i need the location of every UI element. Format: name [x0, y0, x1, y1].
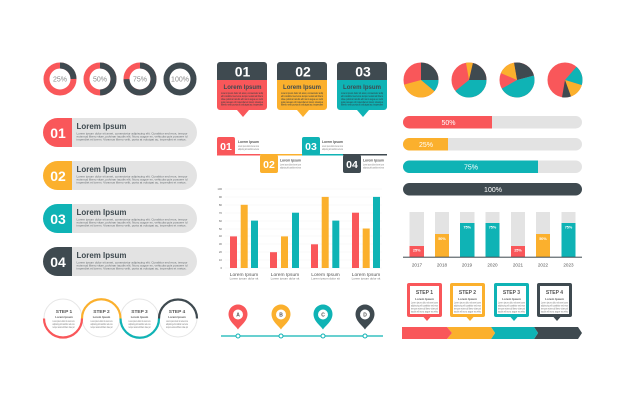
column fills	[410, 223, 576, 257]
step circle 1: Lorem ipsum dolor sit amet cons	[52, 319, 75, 323]
card 03: vitae pulvinar iaculis elit nunc augue ex vehi	[341, 97, 383, 101]
year labels	[412, 262, 574, 268]
panel: yearly stacked columns	[403, 212, 582, 268]
list row 02: 02	[50, 168, 66, 184]
step box 3: STEP 3	[503, 290, 520, 296]
chart category labels: Lorem Ipsum	[230, 272, 258, 278]
list row 03: euismod libero vitae, pulvinar iaculis elit. Nunc augue ex, vehicula quis posuere id	[76, 220, 188, 224]
step box 1	[407, 283, 442, 321]
step box 1: Lorem Ipsum	[415, 297, 434, 301]
pie 2	[459, 70, 479, 90]
card 02: vitae pulvinar iaculis elit nunc augue ex vehi	[281, 97, 323, 101]
step box 4: iaculis elit nunc augue ex vehic	[541, 310, 568, 314]
bar chart	[217, 187, 382, 280]
step box 1: iaculis elit nunc augue ex vehic	[411, 310, 438, 314]
panel: alternating timeline: adipiscing elit curabitur sed eros	[322, 147, 343, 151]
donut 100%: 100%	[171, 76, 189, 84]
card 02: 02	[295, 64, 311, 80]
timeline item 03: Lorem Ipsum	[322, 140, 343, 144]
list row 02: Lorem Ipsum	[76, 164, 127, 174]
step circle 3: tempor euismod libero vitae pul	[128, 325, 151, 329]
card 01: libero velit porta at volutpat ac imperdiet	[221, 102, 263, 106]
chart category labels: Lorem ipsum dolor sit	[271, 276, 300, 280]
list row 02: imperdiet et lorem. Vivamus libero velit, porta at volutpat ac, imperdiet et metus.	[76, 180, 187, 184]
bars group 1	[230, 205, 258, 268]
step box 1: adipiscing elit curabitur sed eros	[411, 304, 438, 308]
card 01: quis posuere id imperdiet et lorem vivamus	[221, 100, 263, 104]
column fills: 25%	[413, 248, 421, 252]
step circle 3	[120, 299, 158, 337]
column fills: 75%	[489, 226, 497, 230]
column fills: 25%	[514, 248, 522, 252]
step circle 1: Lorem Ipsum	[55, 315, 73, 319]
chart gridlines and axis labels: 20	[219, 250, 222, 254]
list row 03: 03	[50, 211, 66, 227]
card 03	[337, 62, 387, 117]
step box 1: Lorem ipsum dolor sit amet cons	[411, 300, 438, 304]
card 01: elit curabitur sed eros tempor euismod libero	[221, 94, 263, 98]
column backgrounds	[410, 212, 576, 257]
year labels: 2017	[412, 262, 423, 268]
donut 75%: 75%	[133, 76, 147, 84]
timeline item 04: Lorem Ipsum	[363, 158, 384, 162]
pin A	[228, 304, 248, 330]
column fills: 50%	[539, 237, 547, 241]
step circle 1	[44, 299, 82, 337]
column fills: 75%	[565, 226, 573, 230]
card 02	[277, 62, 327, 117]
step box 4: STEP 4	[546, 290, 563, 296]
step circle 3: Lorem ipsum dolor sit amet cons	[128, 319, 151, 323]
progress bar 50%	[403, 116, 582, 128]
step box 1: tempor euismod libero vitae pul	[411, 306, 438, 310]
step box 2: Lorem Ipsum	[458, 297, 477, 301]
timeline item 01: 01	[220, 141, 232, 153]
step box 2: Lorem ipsum dolor sit amet cons	[454, 300, 481, 304]
timeline item 01	[217, 137, 259, 155]
step box 3: Lorem Ipsum	[502, 297, 521, 301]
progress bar 75%: 75%	[464, 164, 478, 171]
column fills: 75%	[463, 226, 472, 230]
step box 3: Lorem ipsum dolor sit amet cons	[498, 300, 525, 304]
list row 04	[43, 247, 197, 276]
timeline item 03: 03	[305, 141, 317, 153]
year labels: 2023	[563, 262, 574, 268]
panel: step circles with wave	[44, 299, 197, 338]
donut 25%: 25%	[53, 76, 67, 84]
card 02: Lorem ipsum dolor sit amet, consectetur adip	[281, 91, 323, 95]
list row 03: Lorem ipsum dolor sit amet, consectetur adipiscing elit. Curabitur sed eros, tempor	[76, 218, 188, 222]
step box 3: tempor euismod libero vitae pul	[498, 306, 525, 310]
chart category labels: Lorem Ipsum	[271, 272, 299, 278]
chart gridlines and axis labels: 70	[219, 211, 222, 215]
timeline item 01: Lorem Ipsum	[238, 140, 259, 144]
progress bar 25%: 25%	[419, 142, 433, 149]
timeline item 02: 02	[263, 159, 275, 171]
list row 01: Lorem ipsum dolor sit amet, consectetur adipiscing elit. Curabitur sed eros, tempor	[76, 132, 188, 136]
timeline item 02: Lorem Ipsum	[280, 158, 301, 162]
card 01: 01	[235, 64, 250, 80]
chart gridlines and axis labels: 50	[219, 227, 222, 231]
card 03: libero velit porta at volutpat ac imperdiet	[341, 102, 383, 106]
pin A: A	[236, 312, 240, 318]
chart gridlines and axis labels: 100	[217, 187, 222, 191]
panel: progress donuts	[46, 66, 194, 92]
panel: alternating timeline	[217, 137, 387, 173]
step box 4: tempor euismod libero vitae pul	[541, 306, 568, 310]
panel: step boxes	[407, 283, 572, 321]
card 02: Lorem Ipsum	[283, 84, 321, 91]
donut 50%	[86, 66, 114, 92]
step box 4: Lorem Ipsum	[545, 297, 564, 301]
year labels: 2018	[437, 262, 448, 268]
year labels: 2022	[538, 262, 549, 268]
timeline item 03	[302, 137, 343, 155]
progress bar 25%	[403, 138, 582, 150]
chart category labels: Lorem ipsum dolor sit	[230, 276, 258, 280]
card 03: elit curabitur sed eros tempor euismod libero	[341, 94, 383, 98]
bars group 4	[352, 197, 380, 268]
step circle 4: STEP 4	[169, 309, 186, 315]
donut 50%: 50%	[93, 76, 107, 84]
column baseline	[403, 257, 582, 258]
column fills: 50%	[438, 237, 446, 241]
step box 4	[537, 283, 572, 321]
step circle 1: adipiscing elit curabitur sed eros	[52, 322, 75, 326]
card 03: Lorem Ipsum	[343, 84, 381, 91]
panel: alternating timeline: adipiscing elit curabitur sed eros	[363, 166, 384, 170]
card 03: Lorem ipsum dolor sit amet, consectetur adip	[341, 91, 383, 95]
step box 3: adipiscing elit curabitur sed eros	[498, 304, 525, 308]
step circle 2: adipiscing elit curabitur sed eros	[90, 322, 113, 326]
list row 02: euismod libero vitae, pulvinar iaculis elit. Nunc augue ex, vehicula quis posuere id	[76, 178, 188, 182]
wave line	[44, 299, 197, 338]
chart gridlines and axis labels: 40	[219, 234, 222, 238]
list row 01: euismod libero vitae, pulvinar iaculis elit. Nunc augue ex, vehicula quis posuere id	[76, 134, 188, 138]
step circle 2	[82, 299, 120, 337]
step box 2: adipiscing elit curabitur sed eros	[454, 304, 481, 308]
card 01	[217, 62, 267, 117]
panel: alternating timeline: adipiscing elit curabitur sed eros	[280, 166, 301, 170]
step circle 4: adipiscing elit curabitur sed eros	[166, 322, 188, 326]
donut 25%	[46, 66, 74, 92]
list row 04: Lorem Ipsum	[76, 250, 127, 260]
chart gridlines and axis labels	[217, 187, 382, 270]
step circle 3: STEP 3	[131, 309, 148, 315]
chart category labels	[230, 272, 380, 280]
step circle 2: tempor euismod libero vitae pul	[90, 325, 113, 329]
step circle 4: tempor euismod libero vitae pul	[166, 325, 188, 329]
card 03: 03	[355, 64, 371, 80]
progress bar 100%: 100%	[484, 187, 502, 194]
step circle 4: Lorem ipsum dolor sit amet cons	[166, 319, 188, 323]
list row 04: imperdiet et lorem. Vivamus libero velit, porta at volutpat ac, imperdiet et metus.	[76, 266, 187, 270]
pie 1	[409, 68, 433, 92]
list row 01	[43, 118, 197, 147]
card 01: Lorem ipsum dolor sit amet, consectetur adip	[221, 91, 263, 95]
step circle 3: Lorem Ipsum	[131, 315, 149, 319]
panel: alternating timeline: Lorem ipsum dolor sit amet cons	[238, 144, 259, 148]
step circle 3: adipiscing elit curabitur sed eros	[128, 322, 151, 326]
list row 01: 01	[50, 125, 66, 141]
chart gridlines and axis labels: 60	[219, 219, 222, 223]
chart category labels: Lorem ipsum dolor sit	[311, 276, 340, 280]
step box 1: STEP 1	[416, 290, 433, 296]
pie 4	[553, 68, 577, 92]
chart gridlines and axis labels: 30	[219, 242, 222, 246]
bars group 3	[311, 197, 339, 268]
pin B	[272, 304, 290, 330]
step box 2: STEP 2	[459, 290, 476, 296]
timeline item 04	[343, 155, 384, 173]
step box 4: adipiscing elit curabitur sed eros	[541, 304, 568, 308]
pin D	[356, 304, 374, 330]
card 02: libero velit porta at volutpat ac imperdiet	[281, 102, 323, 106]
donut 100%	[166, 66, 194, 92]
list row 01: imperdiet et lorem. Vivamus libero velit, porta at volutpat ac, imperdiet et metus.	[76, 138, 187, 142]
step box 2	[450, 283, 485, 321]
panel: alternating timeline: Lorem ipsum dolor sit amet cons	[363, 162, 384, 166]
list row 04: euismod libero vitae, pulvinar iaculis elit. Nunc augue ex, vehicula quis posuere id	[76, 264, 188, 268]
list row 04: 04	[50, 254, 66, 270]
list row 02	[43, 161, 197, 190]
timeline axis	[221, 334, 383, 338]
list row 01: Lorem Ipsum	[76, 121, 127, 131]
panel: alternating timeline: adipiscing elit curabitur sed eros	[238, 147, 259, 151]
card 01: vitae pulvinar iaculis elit nunc augue ex vehi	[221, 97, 263, 101]
step box 2: iaculis elit nunc augue ex vehic	[454, 310, 481, 314]
panel: location pins	[221, 304, 383, 338]
year labels: 2019	[462, 262, 473, 268]
pin B: B	[279, 312, 283, 318]
step box 3: iaculis elit nunc augue ex vehic	[498, 310, 525, 314]
step box 2: tempor euismod libero vitae pul	[454, 306, 481, 310]
bars group 2	[270, 213, 299, 268]
step circle 4: Lorem Ipsum	[168, 315, 186, 319]
step circle 2: STEP 2	[93, 309, 110, 315]
arrow: segmented progress arrow	[402, 327, 582, 339]
pin D: D	[363, 312, 367, 318]
pin C: C	[321, 312, 325, 318]
chart category labels: Lorem Ipsum	[311, 272, 340, 278]
timeline line	[217, 154, 387, 156]
step circle 1: STEP 1	[56, 309, 73, 315]
card 02: quis posuere id imperdiet et lorem vivamus	[281, 100, 323, 104]
progress bar 75%	[403, 160, 582, 173]
year labels: 2020	[487, 262, 498, 268]
donut 75%	[126, 66, 154, 92]
step circle 4	[159, 299, 197, 337]
list row 03	[43, 204, 197, 233]
chart gridlines and axis labels: 90	[219, 195, 222, 199]
list row 03: Lorem Ipsum	[76, 207, 127, 217]
step circle 1: tempor euismod libero vitae pul	[52, 325, 75, 329]
panel: numbered list	[43, 118, 197, 276]
chart gridlines and axis labels: 10	[219, 258, 222, 262]
progress bar 50%: 50%	[441, 120, 456, 127]
panel: alternating timeline: Lorem ipsum dolor sit amet cons	[322, 144, 343, 148]
card 01: Lorem Ipsum	[224, 84, 262, 91]
list row 03: imperdiet et lorem. Vivamus libero velit, porta at volutpat ac, imperdiet et metus.	[76, 224, 187, 228]
timeline item 02	[260, 155, 301, 173]
chart category labels: Lorem ipsum dolor sit	[352, 276, 380, 280]
year labels: 2021	[513, 262, 524, 268]
progress bar 100%	[403, 183, 582, 196]
panel: progress bars	[403, 116, 582, 196]
list row 02: Lorem ipsum dolor sit amet, consectetur adipiscing elit. Curabitur sed eros, tempor	[76, 174, 188, 178]
chart gridlines and axis labels: 0	[220, 266, 222, 270]
pie 3	[506, 69, 528, 91]
step box 4: Lorem ipsum dolor sit amet cons	[541, 300, 568, 304]
chart gridlines and axis labels: 80	[219, 203, 222, 207]
card 02: elit curabitur sed eros tempor euismod libero	[281, 94, 323, 98]
panel: alternating timeline: Lorem ipsum dolor sit amet cons	[280, 162, 301, 166]
list row 04: Lorem ipsum dolor sit amet, consectetur adipiscing elit. Curabitur sed eros, tempor	[76, 260, 188, 264]
chart category labels: Lorem Ipsum	[352, 272, 380, 278]
panel: numbered cards	[217, 62, 387, 117]
step circle 2: Lorem Ipsum	[93, 315, 111, 319]
pin C	[314, 304, 332, 330]
timeline item 04: 04	[346, 159, 358, 171]
card 03: quis posuere id imperdiet et lorem vivamus	[341, 100, 383, 104]
step circle 2: Lorem ipsum dolor sit amet cons	[90, 319, 113, 323]
panel: pie charts	[409, 68, 577, 92]
step box 3	[494, 283, 529, 321]
